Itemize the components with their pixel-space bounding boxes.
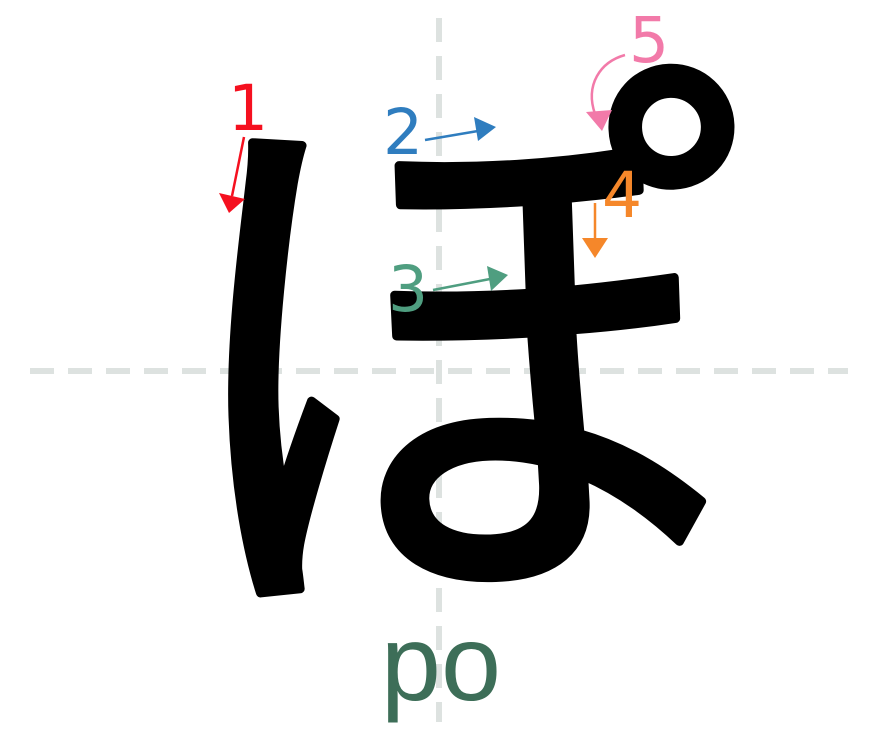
stroke 4: number and arrow: 4	[602, 159, 642, 232]
stroke 5: number and curved arrow: 5	[629, 4, 669, 77]
stroke 3: number and arrow: 3	[388, 253, 428, 326]
romaji label: po: po	[381, 602, 501, 723]
stroke 4: number and arrow	[582, 159, 642, 258]
stroke 5: number and curved arrow	[586, 4, 669, 131]
stroke 1: number and arrow: 1	[228, 72, 268, 145]
stroke 2: number and arrow: 2	[383, 96, 423, 169]
stroke 3: number and arrow	[388, 253, 508, 326]
stroke 2: number and arrow	[383, 96, 496, 169]
stroke 1: number and arrow	[219, 72, 268, 213]
